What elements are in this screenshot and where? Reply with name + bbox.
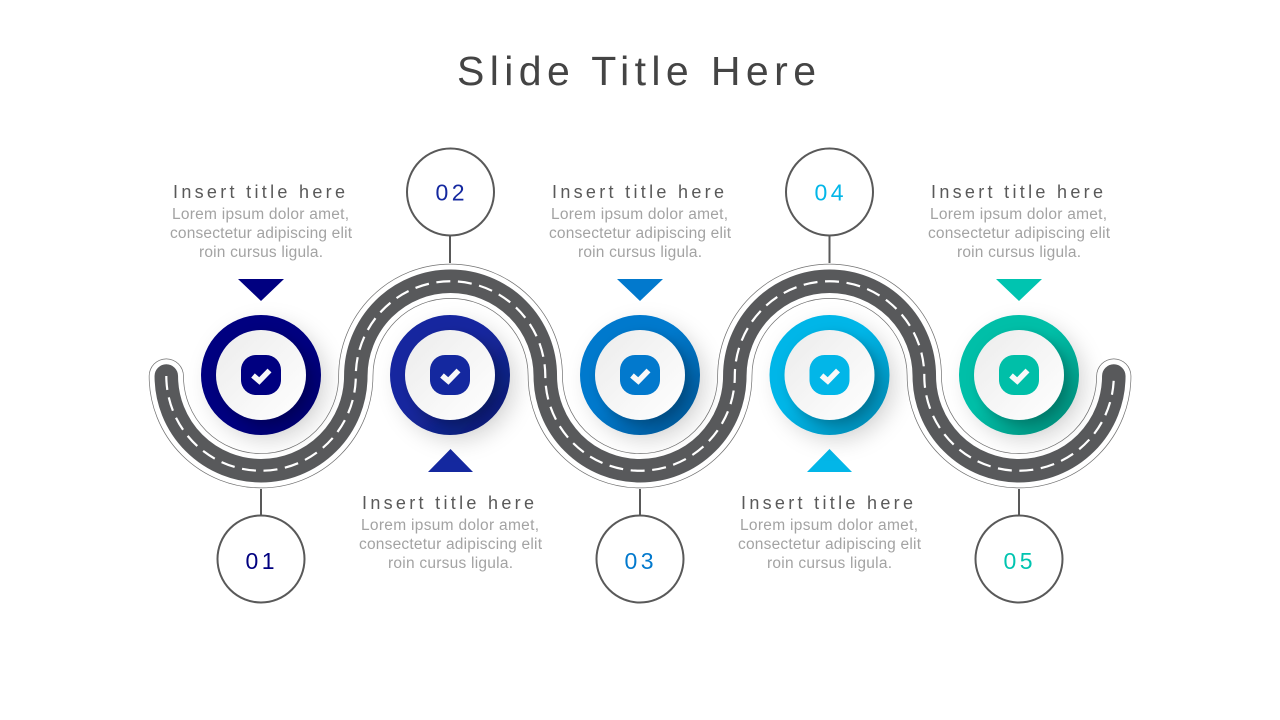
- winding road: [166, 281, 1114, 471]
- arrow 05: [996, 279, 1042, 301]
- number marker 04: 04: [814, 180, 844, 206]
- text block 05: Lorem ipsum dolor amet,: [930, 206, 1107, 223]
- text block 05: Insert title here: [931, 182, 1103, 202]
- text block 03: Insert title here: [552, 182, 724, 202]
- text block 01: Lorem ipsum dolor amet,: [172, 206, 349, 223]
- number marker 05: 05: [1004, 548, 1032, 574]
- number marker 02: 02: [436, 180, 464, 206]
- text block 02: [359, 493, 543, 572]
- arrow 04: [807, 449, 852, 472]
- arrow 01: [238, 279, 284, 301]
- number marker 01: 01: [246, 548, 274, 574]
- text block 02: Insert title here: [362, 493, 534, 513]
- text block 04: [738, 493, 922, 572]
- step 03: [549, 182, 732, 602]
- text block 02: roin cursus ligula.: [388, 555, 513, 572]
- text block 05: consectetur adipiscing elit: [928, 225, 1111, 242]
- icon badge 04: [770, 315, 890, 435]
- text block 04: Lorem ipsum dolor amet,: [740, 517, 918, 534]
- text block 05: roin cursus ligula.: [957, 244, 1081, 261]
- number marker 03: 03: [624, 548, 654, 574]
- text block 03: roin cursus ligula.: [578, 244, 702, 261]
- text block 02: consectetur adipiscing elit: [359, 536, 543, 553]
- text block 01: Insert title here: [173, 182, 345, 202]
- number marker 03: [596, 489, 684, 602]
- text block 04: consectetur adipiscing elit: [738, 536, 922, 553]
- number marker 02: [407, 148, 494, 263]
- text block 04: Insert title here: [741, 493, 913, 513]
- text block 01: [170, 182, 353, 261]
- icon badge 01: [201, 315, 321, 435]
- icon badge 03: [580, 315, 700, 435]
- text block 01: roin cursus ligula.: [199, 244, 323, 261]
- number marker 04: [786, 148, 873, 263]
- icon badge 05: [959, 315, 1079, 435]
- text block 03: consectetur adipiscing elit: [549, 225, 732, 242]
- step 05: [928, 182, 1111, 602]
- text block 03: [549, 182, 732, 261]
- arrow 03: [617, 279, 663, 301]
- title: Slide Title Here: [457, 48, 816, 94]
- arrow 02: [428, 449, 473, 472]
- text block 03: Lorem ipsum dolor amet,: [551, 206, 728, 223]
- text block 05: [928, 182, 1111, 261]
- text block 04: roin cursus ligula.: [767, 555, 892, 572]
- number marker 01: [218, 489, 304, 602]
- text block 01: consectetur adipiscing elit: [170, 225, 353, 242]
- step 02: [359, 148, 543, 572]
- text block 02: Lorem ipsum dolor amet,: [361, 517, 539, 534]
- icon badge 02: [390, 315, 510, 435]
- step 01: [170, 182, 353, 602]
- number marker 05: [976, 489, 1062, 602]
- step 04: [738, 148, 922, 572]
